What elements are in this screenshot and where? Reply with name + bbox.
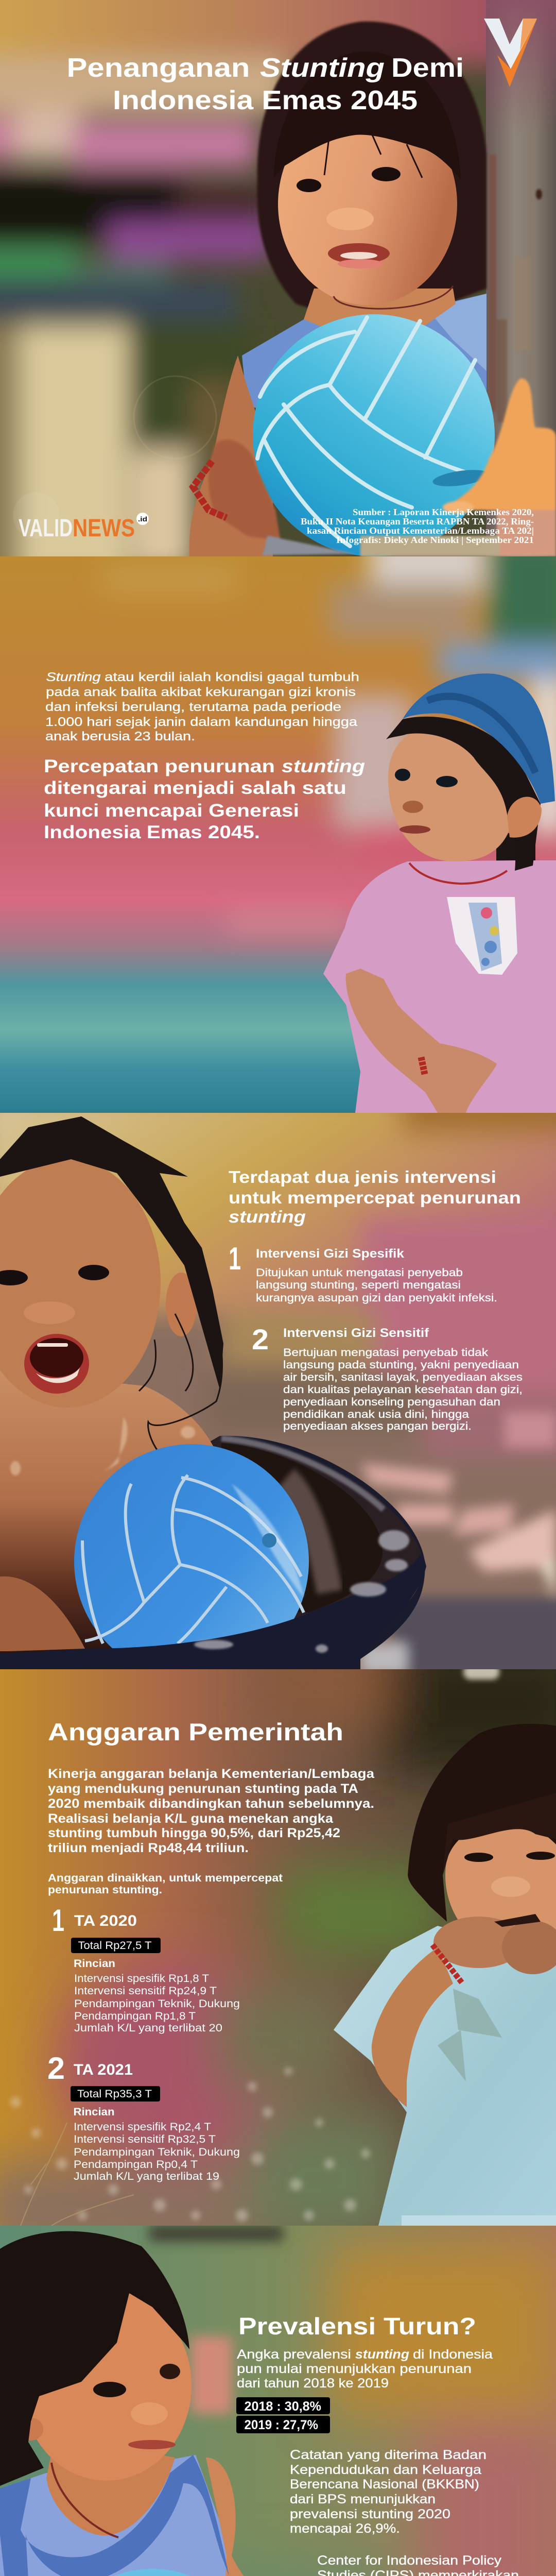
BKKBN note: mencapai 26,9%. bbox=[290, 2521, 400, 2536]
intervention 2: air bersih, sanitasi layak, penyediaan akses bbox=[283, 1371, 523, 1383]
budget paragraph: 2020 membaik dibandingkan tahun sebelumnya. bbox=[48, 1797, 374, 1811]
budget TA 2021: 2 bbox=[47, 2051, 65, 2086]
intervention 2 bbox=[252, 1323, 523, 1432]
BKKBN note: dari BPS menunjukkan bbox=[290, 2492, 436, 2506]
intro paragraph: Stunting bbox=[46, 670, 101, 684]
intro paragraph: 1.000 hari sejak janin dalam kandungan hingga bbox=[45, 715, 358, 729]
budget TA 2021: Jumlah K/L yang terlibat 19 bbox=[74, 2171, 219, 2182]
budget TA 2020: Intervensi spesifik Rp1,8 T bbox=[74, 1973, 209, 1985]
prevalence intro: dari tahun 2018 ke 2019 bbox=[237, 2376, 389, 2391]
budget paragraph: triliun menjadi Rp48,44 triliun. bbox=[48, 1841, 249, 1855]
intervention 2: penyediaan konseling pengasuhan dan bbox=[283, 1396, 500, 1408]
prevalence intro: di Indonesia bbox=[413, 2347, 493, 2362]
key statement: Percepatan penurunan bbox=[44, 756, 275, 776]
logo: Validnews bbox=[19, 513, 149, 542]
prevalence intro: stunting bbox=[355, 2347, 409, 2362]
key statement: ditengarai menjadi salah satu bbox=[44, 778, 346, 798]
photo: blurred court background bbox=[0, 2226, 556, 2576]
photo: blurred court background bbox=[0, 536, 556, 1113]
heading: stunting bbox=[229, 1207, 306, 1226]
CIPS note bbox=[317, 2553, 519, 2576]
budget TA 2020: Total Rp27,5 T bbox=[78, 1940, 152, 1952]
stat box 2019: 2019 : 27,7% bbox=[244, 2418, 318, 2432]
logo: Validnews: VALID bbox=[19, 515, 73, 542]
budget TA 2020 bbox=[52, 1903, 240, 2034]
title bbox=[67, 53, 464, 115]
intervention 2: 2 bbox=[252, 1323, 269, 1355]
intro paragraph: pada anak balita akibat kekurangan gizi kronis bbox=[46, 685, 356, 699]
key statement bbox=[44, 756, 365, 842]
intervention 1: 1 bbox=[229, 1241, 241, 1277]
intro paragraph: anak berusia 23 bulan. bbox=[45, 730, 195, 743]
intervention 1: Ditujukan untuk mengatasi penyebab bbox=[256, 1266, 463, 1279]
illustration: child in tub with ball bbox=[0, 1116, 426, 1679]
stat box 2018: 2018 : 30,8% bbox=[244, 2399, 321, 2414]
intro paragraph: dan infeksi berulang, terutama pada periode bbox=[45, 700, 341, 714]
panel: definition of stunting bbox=[0, 556, 556, 1113]
budget TA 2020: Pendampingan Teknik, Dukung bbox=[74, 1998, 240, 2010]
intervention 2: Bertujuan mengatasi penyebab tidak bbox=[283, 1346, 488, 1359]
BKKBN note: prevalensi stunting 2020 bbox=[290, 2507, 450, 2521]
budget TA 2021 bbox=[47, 2051, 240, 2182]
budget TA 2020: Jumlah K/L yang terlibat 20 bbox=[74, 2022, 222, 2034]
stat box 2018 bbox=[236, 2397, 330, 2414]
budget TA 2021: TA 2021 bbox=[74, 2061, 133, 2078]
illustration: child holding ball bbox=[0, 2231, 306, 2576]
budget TA 2020: Rincian bbox=[74, 1958, 115, 1970]
logo: V mark bbox=[484, 19, 537, 87]
budget paragraph: stunting tumbuh hingga 90,5%, dari Rp25,42 bbox=[48, 1826, 340, 1840]
heading: Prevalensi Turun? bbox=[238, 2313, 476, 2340]
budget TA 2020: Intervensi sensitif Rp24,9 T bbox=[74, 1985, 217, 1997]
intervention 2: penyediaan akses pangan bergizi. bbox=[283, 1420, 472, 1432]
intervention 1: Intervensi Gizi Spesifik bbox=[256, 1247, 405, 1261]
budget TA 2020: 1 bbox=[52, 1903, 64, 1938]
BKKBN note: Kependudukan dan Keluarga bbox=[290, 2463, 481, 2477]
subheading: penurunan stunting. bbox=[48, 1884, 162, 1896]
prevalence intro: pun mulai menunjukkan penurunan bbox=[237, 2362, 472, 2376]
budget TA 2020: TA 2020 bbox=[74, 1912, 137, 1929]
budget TA 2021: Pendampingan Rp0,4 T bbox=[74, 2159, 198, 2171]
budget TA 2021: Intervensi sensitif Rp32,5 T bbox=[74, 2133, 216, 2145]
budget paragraph: yang mendukung penurunan stunting pada TA bbox=[48, 1782, 358, 1796]
key statement: stunting bbox=[282, 756, 365, 776]
heading: Anggaran Pemerintah bbox=[48, 1718, 343, 1745]
source credits: kasan Rincian Output Kementerian/Lembaga TA 202| bbox=[307, 526, 534, 536]
intro paragraph bbox=[45, 670, 359, 743]
intervention 1: kurangnya asupan gizi dan penyakit infeksi. bbox=[256, 1292, 497, 1304]
source credits: Buku II Nota Keuangan Beserta RAPBN TA 2022, Ring- bbox=[301, 516, 534, 527]
photo: blurred playground background bbox=[0, 0, 556, 582]
BKKBN note: Berencana Nasional (BKKBN) bbox=[290, 2477, 479, 2492]
illustration: child eating bbox=[334, 1724, 556, 2226]
title: Stunting bbox=[260, 53, 385, 83]
CIPS note: Center for Indonesian Policy bbox=[317, 2553, 502, 2568]
prevalence intro bbox=[237, 2347, 493, 2391]
logo: Validnews: .id bbox=[138, 515, 147, 523]
intervention 2: Intervensi Gizi Sensitif bbox=[283, 1326, 429, 1340]
title: Demi bbox=[391, 53, 464, 83]
source credits bbox=[301, 507, 534, 545]
heading bbox=[229, 1167, 521, 1226]
panel: two interventions bbox=[0, 1113, 556, 1669]
budget paragraph: Kinerja anggaran belanja Kementerian/Lembaga bbox=[48, 1767, 375, 1781]
title: Indonesia Emas 2045 bbox=[113, 86, 418, 115]
photo: metal pole bbox=[486, 0, 556, 556]
budget TA 2021: Total Rp35,3 T bbox=[77, 2088, 152, 2100]
source credits: Sumber : Laporan Kinerja Kemenkes 2020, bbox=[353, 507, 534, 517]
prevalence intro: Angka prevalensi bbox=[237, 2347, 351, 2362]
budget TA 2020: Pendampingan Rp1,8 T bbox=[74, 2010, 196, 2022]
intervention 1: langsung stunting, seperti mengatasi bbox=[256, 1279, 461, 1291]
key statement: kunci mencapai Generasi bbox=[44, 801, 299, 821]
budget paragraph bbox=[48, 1767, 375, 1855]
budget TA 2021: Rincian bbox=[73, 2106, 114, 2118]
subheading: Anggaran dinaikkan, untuk mempercepat bbox=[48, 1872, 283, 1884]
photo: blurred floor background bbox=[0, 1092, 556, 1680]
panel: government budget bbox=[0, 1669, 556, 2226]
intervention 2: dan kualitas pelayanan kesehatan dan gizi, bbox=[283, 1383, 523, 1396]
budget TA 2021: Intervensi spesifik Rp2,4 T bbox=[74, 2121, 211, 2133]
stat box 2019 bbox=[236, 2416, 330, 2433]
source credits: Infografis: Dieky Ade Ninoki | September 2021 bbox=[336, 535, 534, 545]
intervention 2: langsung pada stunting, yakni penyediaan bbox=[283, 1359, 519, 1371]
illustration: child with ball bbox=[189, 22, 556, 556]
photo: blurred meadow background bbox=[0, 1638, 556, 2257]
key statement: Indonesia Emas 2045. bbox=[44, 822, 260, 842]
intervention 1 bbox=[229, 1241, 497, 1304]
logo: Validnews: NEWS bbox=[73, 515, 135, 542]
BKKBN note bbox=[290, 2448, 486, 2536]
heading: Terdapat dua jenis intervensi bbox=[229, 1167, 496, 1187]
illustration: child with denim cap bbox=[323, 673, 556, 1113]
title: Penanganan bbox=[67, 53, 250, 83]
intro paragraph: atau kerdil ialah kondisi gagal tumbuh bbox=[105, 670, 359, 684]
budget TA 2021: Pendampingan Teknik, Dukung bbox=[74, 2146, 240, 2158]
intervention 2: pendidikan anak usia dini, hingga bbox=[283, 1408, 469, 1420]
budget paragraph: Realisasi belanja K/L guna menekan angka bbox=[48, 1811, 334, 1826]
panel: cover bbox=[0, 0, 556, 556]
heading: untuk mempercepat penurunan bbox=[229, 1188, 521, 1207]
BKKBN note: Catatan yang diterima Badan bbox=[290, 2448, 486, 2462]
subheading bbox=[48, 1872, 283, 1896]
panel: prevalence bbox=[0, 2226, 556, 2576]
